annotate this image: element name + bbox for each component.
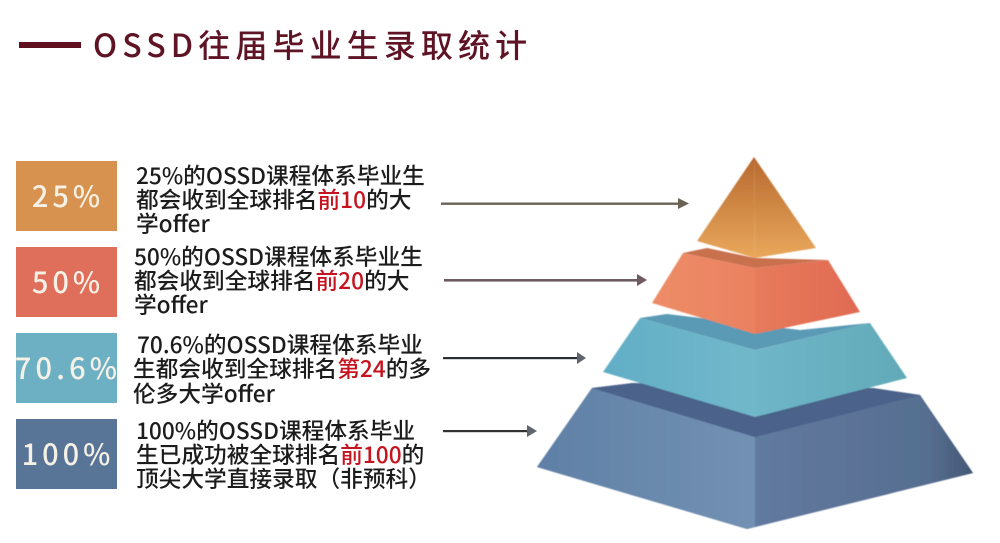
arrow: 70.6% (443, 352, 586, 364)
text block: 25%: 都会收到全球排名前10的大 (136, 182, 411, 215)
arrow: 25% (441, 198, 689, 209)
text block: 50%: 都会收到全球排名前20的大 (134, 263, 409, 296)
panel: 100% row (16, 413, 431, 494)
tier: 50% (652, 248, 860, 334)
pyramid chart (537, 157, 973, 529)
text block: 100%: 生已成功被全球排名前100的 (136, 437, 424, 470)
text block: 25%: 学offer (136, 206, 211, 239)
text block: 100%: 100%的OSSD课程体系毕业 (136, 413, 415, 446)
text block: 70.6%: 70.6%的OSSD课程体系毕业 (137, 327, 423, 360)
badge: 50% (16, 247, 117, 317)
badge: 25%: 25% (32, 174, 104, 216)
text block: 100% (136, 413, 431, 494)
badge: 70.6%: 70.6% (15, 346, 121, 388)
badge: 70.6% (15, 333, 121, 403)
text block: 25% (136, 158, 425, 239)
panel: 70.6% row (15, 327, 431, 409)
title: OSSD往届毕业生录取统计 (93, 21, 532, 67)
badge: 25% (16, 161, 117, 231)
panel: 50% row (16, 239, 423, 320)
badge: 100%: 100% (22, 432, 114, 474)
panel: 25% row (16, 158, 425, 239)
tier: 25% top (697, 157, 816, 258)
badge: 50%: 50% (32, 260, 104, 302)
text block: 50% (134, 239, 423, 320)
text block: 70.6% (133, 327, 431, 409)
tier: 100% base (537, 383, 973, 529)
arrow: 50% (444, 274, 647, 286)
text block: 100%: 顶尖大学直接录取（非预科） (136, 461, 431, 494)
tier: 70.6% (603, 314, 907, 417)
text block: 50%: 50%的OSSD课程体系毕业生 (134, 239, 423, 272)
badge: 100% (16, 419, 117, 489)
text block: 25%: 25%的OSSD课程体系毕业生 (136, 158, 425, 191)
arrow: 100% (443, 425, 537, 437)
text block: 70.6%: 生都会收到全球排名第24的多 (133, 351, 431, 384)
text block: 50%: 学offer (134, 287, 209, 320)
text block: 70.6%: 伦多大学offer (133, 376, 276, 409)
